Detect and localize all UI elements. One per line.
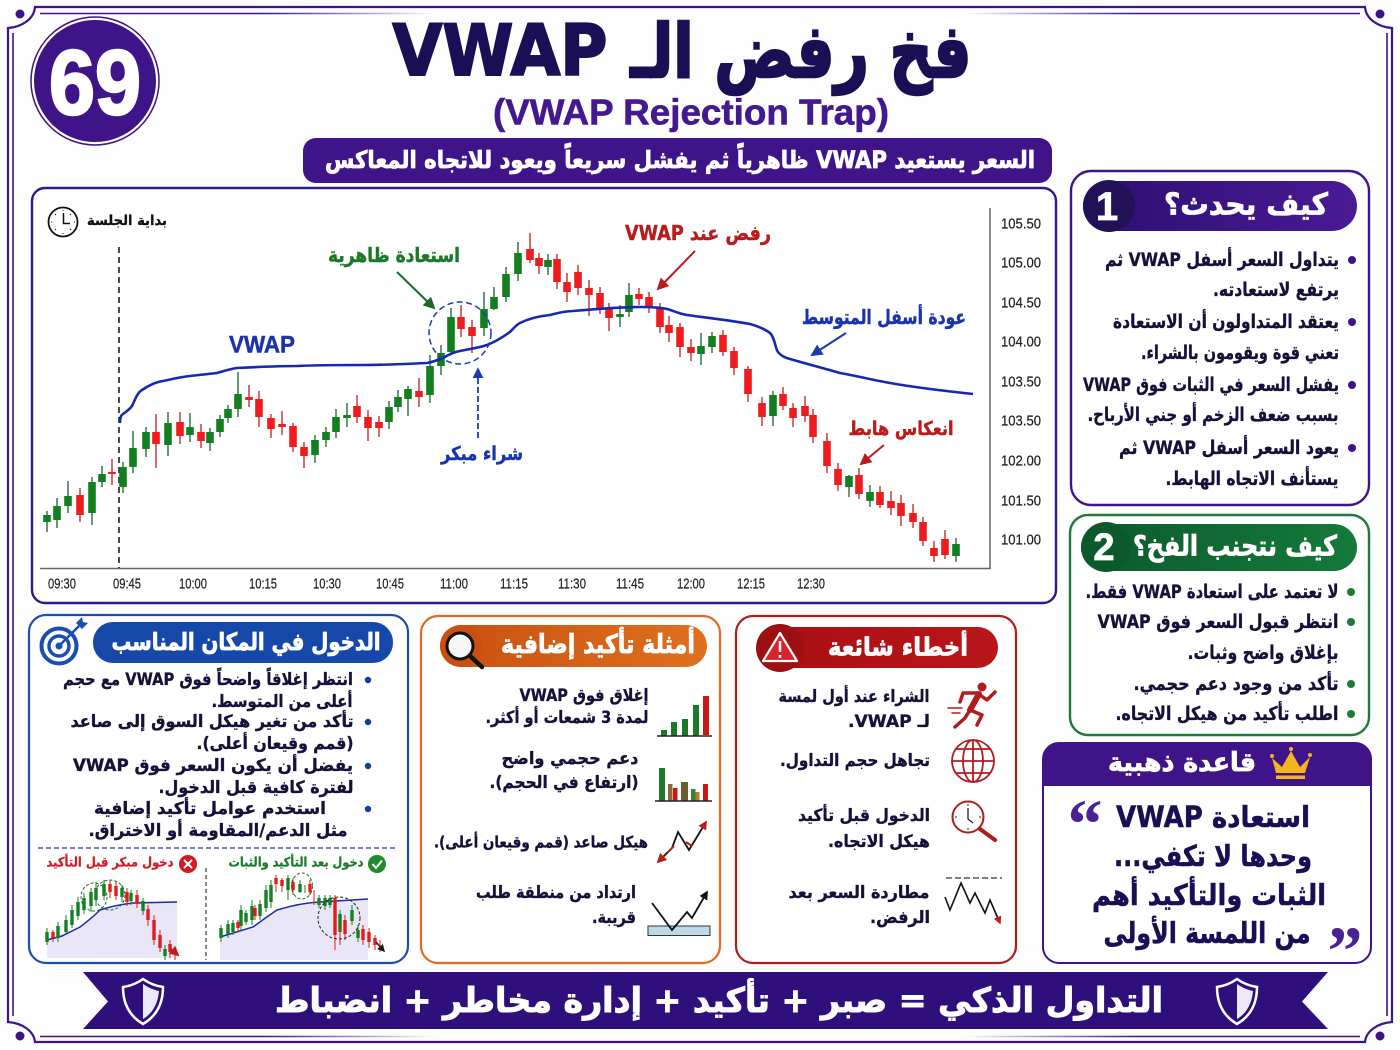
x axis labels: 11:45 — [616, 576, 644, 592]
bullet list: يعتقد المتداولون أن الاستعادة — [1113, 309, 1339, 333]
bullet list: بإغلاق واضح وثبات. — [1188, 642, 1338, 664]
item: close above VWAP — [486, 686, 648, 728]
panel: right entry — [29, 615, 408, 963]
header pill — [93, 622, 393, 663]
item: volume support — [490, 749, 639, 793]
label: bearish reversal: انعكاس هابط — [848, 418, 954, 440]
header pill: الدخول في المكان المناسب — [112, 628, 380, 656]
x axis labels — [48, 576, 825, 592]
item: chasing price — [788, 883, 930, 928]
item: volume support: دعم حجمي واضح — [502, 749, 639, 769]
quote text: من اللمسة الأولى — [1104, 915, 1310, 950]
item: buying first touch — [778, 685, 930, 732]
y axis labels: 104.00 — [1001, 334, 1041, 350]
bullet list: يتداول السعر أسفل VWAP ثم — [1105, 247, 1339, 271]
item: bounce from demand: ارتداد من منطقة طلب — [476, 883, 636, 903]
header pill: كيف نتجنب الفخ؟ — [1133, 530, 1338, 562]
icon: right shield — [1217, 979, 1257, 1024]
bullet list: أعلى من المتوسط. — [212, 690, 352, 712]
x axis labels: 11:15 — [500, 576, 528, 592]
bullet list — [1083, 247, 1356, 490]
title — [392, 9, 972, 95]
label: apparent recovery: استعادة ظاهرية — [328, 243, 460, 267]
y axis labels: 103.50 — [1001, 374, 1041, 390]
x axis labels: 10:30 — [313, 576, 341, 592]
label: return below average: عودة أسفل المتوسط — [802, 303, 966, 329]
x axis labels: 11:00 — [440, 576, 468, 592]
x axis labels: 12:30 — [797, 576, 825, 592]
panel: price chart — [32, 188, 1056, 603]
subtitle: (VWAP Rejection Trap) — [493, 92, 889, 132]
badge: number 69 — [31, 17, 159, 145]
icon: clock magnifier — [952, 802, 995, 840]
header pill: 2 — [1093, 527, 1115, 569]
item: bounce from demand — [476, 883, 636, 928]
icon: session clock — [48, 208, 78, 236]
title: VWAP — [392, 10, 608, 92]
icon: target — [42, 617, 88, 664]
header pill: 1 — [1096, 185, 1118, 229]
x axis labels: 12:15 — [737, 576, 765, 592]
header pill — [1081, 522, 1357, 572]
bullet list: يرتفع لاستعادته. — [1213, 279, 1339, 301]
label: session start: بداية الجلسة — [87, 213, 167, 229]
icon: falling zigzag — [945, 878, 1002, 923]
bullet list: يفضل أن يكون السعر فوق VWAP — [73, 754, 353, 776]
quote text: استعادة VWAP — [1116, 800, 1310, 834]
x axis labels: 11:30 — [558, 576, 586, 592]
icon: left shield — [123, 979, 163, 1024]
y axis labels: 105.50 — [1001, 216, 1041, 232]
bullet list: اطلب تأكيد من هيكل الاتجاه. — [1116, 701, 1338, 725]
bullet list: لا تعتمد على استعادة VWAP فقط. — [1086, 581, 1338, 603]
bullet list — [1086, 581, 1355, 725]
panel: how to avoid the trap — [1070, 515, 1369, 735]
item: bullish structure: هيكل صاعد (قمم وقيعان أعلى). — [434, 832, 648, 852]
x axis labels: 10:00 — [179, 576, 207, 592]
label: early buy: شراء مبكر — [440, 443, 523, 465]
panel: common mistakes — [736, 616, 1016, 963]
y axis labels: 101.00 — [1001, 532, 1041, 548]
header pill — [756, 624, 998, 672]
bullet list — [63, 666, 371, 841]
heading: قاعدة ذهبية — [1108, 748, 1256, 778]
arrow: bearish reversal — [861, 445, 884, 464]
x axis labels: 10:15 — [249, 576, 277, 592]
panel: additional confirmation examples — [421, 616, 720, 963]
arrow: early buy — [477, 369, 479, 438]
x axis labels: 10:45 — [376, 576, 404, 592]
bullet list: (قمم وقيعان أعلى). — [196, 732, 354, 754]
bullet list: يستأنف الاتجاه الهابط. — [1166, 466, 1338, 490]
quote text: الثبات والتأكيد أهم — [1092, 876, 1326, 912]
panel: golden rule — [1043, 743, 1371, 990]
VWAP line — [120, 307, 973, 423]
title: فخ رفض الـ — [630, 9, 972, 95]
header pill — [1083, 180, 1357, 232]
label: confirmed entry: دخول بعد التأكيد والثبات — [228, 854, 364, 870]
item: bounce from demand: قريبة. — [592, 908, 636, 928]
header pill: كيف يحدث؟ — [1164, 188, 1329, 222]
quote text: وحدها لا تكفي... — [1114, 839, 1312, 873]
ribbon: summary sentence — [303, 138, 1052, 183]
item: chasing price: مطاردة السعر بعد — [788, 883, 930, 903]
bullet list: مثل الدعم/المقاومة أو الاختراق. — [88, 819, 348, 841]
label: rejection at VWAP: رفض عند VWAP — [625, 221, 771, 245]
item: close above VWAP: إغلاق فوق VWAP — [520, 686, 648, 706]
x axis labels: 09:45 — [113, 576, 141, 592]
candlesticks: red — [80, 233, 945, 562]
item: entering before confirmation — [798, 804, 930, 852]
mini chart: early entry (wrong) — [47, 880, 178, 960]
item: buying first touch: الشراء عند أول لمسة — [778, 685, 930, 707]
arrow: to recovery — [397, 272, 434, 308]
badge: number 69: 69 — [49, 32, 141, 134]
arrow: rejection — [658, 251, 695, 289]
x axis labels: 09:30 — [48, 576, 76, 592]
label: early entry: دخول مبكر قبل التأكيد — [46, 854, 174, 870]
y axis labels: 102.00 — [1001, 452, 1041, 470]
y axis labels — [1001, 216, 1041, 548]
label: VWAP: VWAP — [229, 332, 295, 358]
opening quote mark: “ — [1068, 786, 1102, 864]
y axis labels: 101.50 — [1001, 492, 1041, 510]
item: volume support: (ارتفاع في الحجم). — [490, 773, 638, 793]
icon: rising bars — [657, 696, 712, 736]
y axis labels: 105.00 — [1001, 254, 1041, 272]
y axis labels: 103.50 — [1001, 412, 1041, 430]
bullet list: انتظر قبول السعر فوق VWAP — [1098, 611, 1338, 633]
item: chasing price: الرفض. — [870, 908, 930, 928]
item: entering before confirmation: الدخول قبل تأكيد — [798, 804, 930, 826]
bullet list: انتظر إغلاقاً واضحاً فوق VWAP مع حجم — [63, 666, 353, 690]
banner text: التداول الذكي = صبر + تأكيد + إدارة مخاطر + انضباط — [275, 978, 1163, 1021]
bullet list: بسبب ضعف الزخم أو جني الأرباح. — [1088, 402, 1338, 426]
bullet list: يفشل السعر في الثبات فوق VWAP — [1083, 374, 1339, 396]
item: close above VWAP: لمدة 3 شمعات أو أكثر. — [486, 706, 648, 728]
ribbon: summary sentence: السعر يستعيد VWAP ظاهرياً ثم يفشل سريعاً ويعود للاتجاه المعاكس — [325, 143, 1035, 174]
icon: runner — [948, 682, 995, 727]
icon: rising zigzag — [658, 822, 706, 862]
icon: crown — [1270, 747, 1312, 779]
bullet list: تأكد من وجود دعم حجمي. — [1134, 671, 1338, 695]
item: buying first touch: لـ VWAP. — [848, 712, 930, 732]
header pill — [440, 625, 707, 667]
item: ignoring volume: تجاهل حجم التداول. — [780, 751, 930, 771]
header pill: أمثلة تأكيد إضافية — [501, 627, 695, 660]
bullet list: يعود السعر أسفل VWAP ثم — [1119, 435, 1339, 459]
bullet list: تأكد من تغير هيكل السوق إلى صاعد — [70, 710, 354, 732]
item: entering before confirmation: هيكل الاتجاه. — [828, 832, 930, 852]
mini chart: confirmed entry (right) — [220, 873, 384, 960]
arrow: return below — [812, 333, 846, 355]
icon: demand zone bounce — [648, 892, 710, 936]
header band — [1043, 743, 1371, 786]
bottom banner — [83, 972, 1328, 1029]
quote text — [1092, 800, 1326, 950]
icon: volume bars — [655, 768, 712, 801]
x axis labels: 12:00 — [677, 576, 705, 592]
bullet list: تعني قوة ويقومون بالشراء. — [1141, 342, 1339, 364]
bullet list: لفترة كافية قبل الدخول. — [158, 778, 354, 798]
header pill: أخطاء شائعة — [828, 630, 968, 662]
closing quote mark: ” — [1328, 914, 1362, 990]
bullet list: استخدم عوامل تأكيد إضافية — [94, 797, 326, 819]
false recovery circle — [429, 302, 491, 364]
y axis labels: 104.50 — [1001, 294, 1041, 312]
icon: globe — [952, 740, 994, 782]
panel: how does it happen — [1071, 171, 1369, 505]
session start marker line — [118, 247, 120, 568]
candlesticks: green — [47, 242, 956, 562]
